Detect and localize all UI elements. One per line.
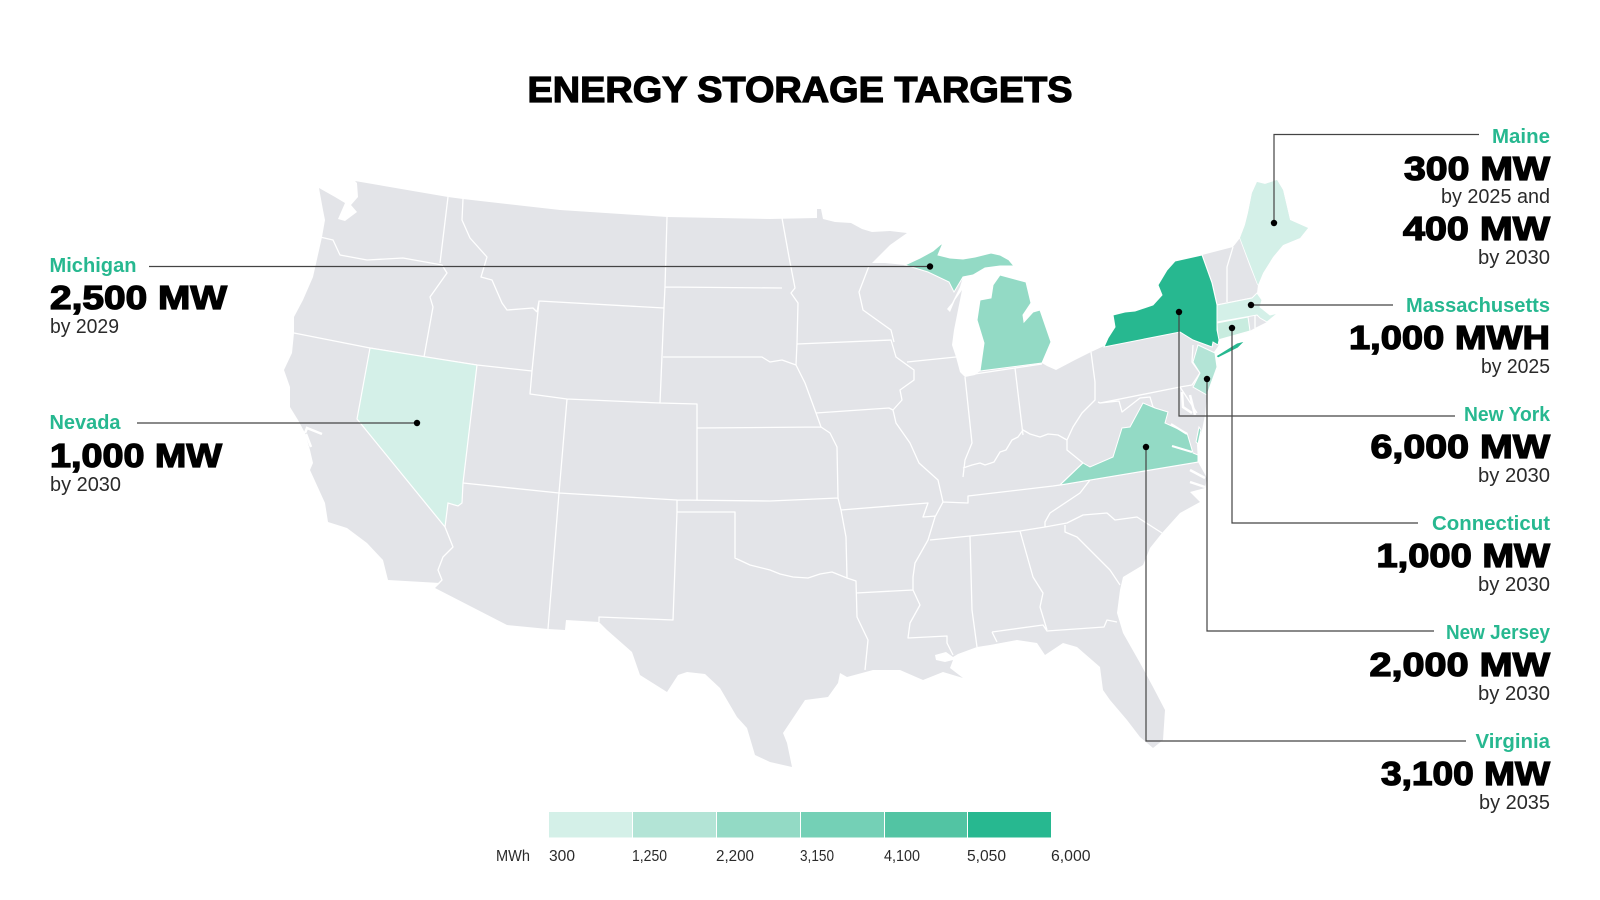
leader: New Jersey xyxy=(1204,376,1434,631)
state: New Jersey xyxy=(1193,345,1217,395)
Maryland bay and sounds xyxy=(305,392,1205,487)
Chesapeake inlets xyxy=(1171,424,1192,452)
leader: Massachusetts xyxy=(1248,302,1393,308)
legend labels xyxy=(496,848,1091,865)
state: Nevada xyxy=(357,348,477,527)
Virginia label: Virginia xyxy=(1476,731,1551,753)
legend labels: 300 xyxy=(549,848,575,865)
leader: Nevada xyxy=(137,420,420,426)
Michigan label: Michigan xyxy=(50,255,136,277)
Connecticut value: 1,000 MW xyxy=(1376,537,1551,574)
callout: Connecticut xyxy=(1229,325,1551,596)
legend labels: MWh xyxy=(496,848,530,865)
Nevada value: 1,000 MW xyxy=(50,437,223,474)
Nevada date: by 2030 xyxy=(50,474,121,496)
callout: New Jersey xyxy=(1204,376,1551,705)
state: New York xyxy=(1104,255,1245,358)
Connecticut date: by 2030 xyxy=(1478,574,1550,596)
leader: Connecticut xyxy=(1229,325,1418,523)
Massachusetts value: 1,000 MWH xyxy=(1349,319,1550,356)
legend labels: 1,250 xyxy=(632,848,667,865)
legend labels: 6,000 xyxy=(1051,848,1091,865)
callout: Massachusetts xyxy=(1248,295,1550,378)
state: Connecticut xyxy=(1217,317,1250,340)
legend labels: 4,100 xyxy=(884,848,920,865)
Michigan value: 2,500 MW xyxy=(50,279,228,316)
New Jersey date: by 2030 xyxy=(1478,683,1550,705)
Maine label: Maine xyxy=(1492,126,1550,148)
New York date: by 2030 xyxy=(1478,465,1550,487)
legend labels: 5,050 xyxy=(967,848,1006,865)
leader: New York xyxy=(1176,309,1455,416)
legend xyxy=(496,812,1091,865)
New Jersey label: New Jersey xyxy=(1446,622,1551,644)
state: Massachusetts xyxy=(1217,293,1278,322)
Nevada label: Nevada xyxy=(50,412,121,434)
New York label: New York xyxy=(1464,404,1551,426)
Michigan date: by 2029 xyxy=(50,316,119,338)
Maine date 2025: by 2025 and xyxy=(1441,186,1550,208)
callout: Michigan xyxy=(50,255,933,338)
New Jersey value: 2,000 MW xyxy=(1370,646,1551,683)
leader: Michigan xyxy=(149,263,933,270)
Maine value 2030: 400 MW xyxy=(1403,210,1551,247)
callout: Virginia xyxy=(1143,444,1551,814)
leader: Maine xyxy=(1271,134,1479,226)
Connecticut label: Connecticut xyxy=(1432,513,1550,535)
Maine date 2030: by 2030 xyxy=(1478,247,1550,269)
Massachusetts label: Massachusetts xyxy=(1406,295,1550,317)
Maine value 2025: 300 MW xyxy=(1404,150,1551,187)
Virginia date: by 2035 xyxy=(1479,792,1550,814)
state borders xyxy=(294,197,1258,670)
Virginia value: 3,100 MW xyxy=(1381,755,1551,792)
title: ENERGY STORAGE TARGETS xyxy=(528,69,1072,110)
callout: Maine xyxy=(1271,126,1551,269)
legend labels: 2,200 xyxy=(716,848,754,865)
Massachusetts date: by 2025 xyxy=(1481,356,1550,378)
New York value: 6,000 MW xyxy=(1370,428,1551,465)
leader: Virginia xyxy=(1143,444,1466,741)
legend labels: 3,150 xyxy=(800,848,834,865)
state: Maine xyxy=(1240,180,1308,285)
land outline xyxy=(284,180,1308,767)
state: Virginia xyxy=(1060,403,1201,485)
map: contiguous United States xyxy=(284,180,1308,767)
state: Michigan xyxy=(905,243,1051,371)
callout: Nevada xyxy=(50,412,420,496)
legend colour scale xyxy=(549,812,1051,838)
callout: New York xyxy=(1176,309,1551,487)
